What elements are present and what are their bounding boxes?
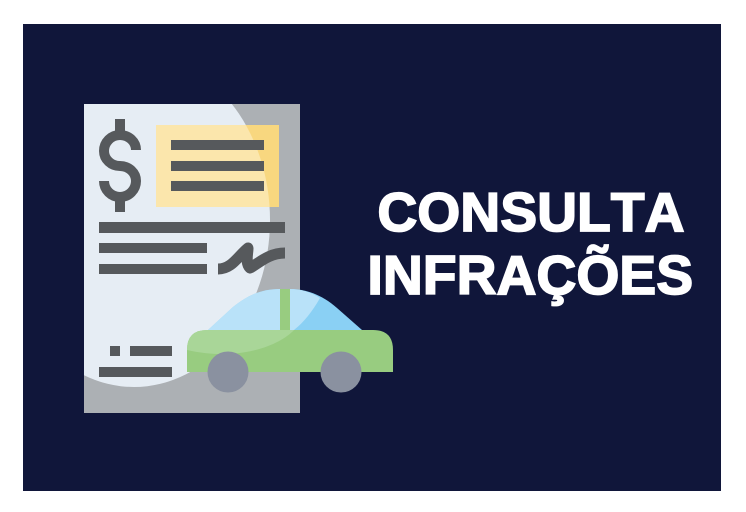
title xyxy=(368,181,693,306)
title line 2: INFRAÇÕES xyxy=(368,244,693,306)
note text lines xyxy=(171,140,264,191)
document sheet xyxy=(84,104,300,413)
icon: document with car xyxy=(84,104,393,413)
title line 1: CONSULTA xyxy=(378,181,685,243)
car windows xyxy=(208,289,362,330)
car xyxy=(187,289,393,392)
car body xyxy=(187,330,393,372)
car pillar xyxy=(280,289,290,330)
signature xyxy=(218,248,285,269)
car window highlight xyxy=(208,289,320,330)
front wheel xyxy=(320,352,362,392)
document text lines xyxy=(99,222,285,274)
rear wheel xyxy=(208,352,248,392)
footer lines xyxy=(99,346,172,377)
car body highlight xyxy=(187,330,294,354)
icon: dollar sign xyxy=(104,119,136,212)
yellow note xyxy=(156,125,279,207)
